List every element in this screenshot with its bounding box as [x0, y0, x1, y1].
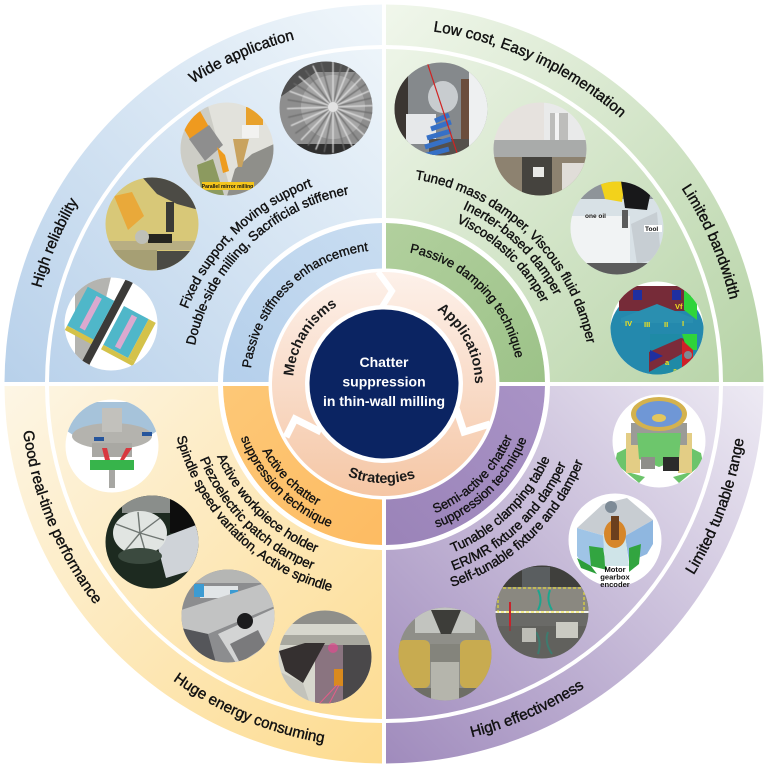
center title — [323, 354, 445, 409]
circular arrows ring — [286, 272, 490, 480]
method list line 1: Fixed support, Moving support — [179, 178, 313, 308]
image label: one oil: one oil — [585, 213, 606, 220]
image labels: Motor gearbox encoder: encoder — [600, 580, 630, 589]
outer label: Wide application: Wide application — [187, 32, 294, 82]
image labels: model zones: a — [673, 366, 678, 375]
quadrant background: purple bands — [386, 386, 764, 764]
technique label: Passive stiffness enhancement — [242, 242, 368, 368]
method list line 3: Spindle speed variation, Active spindle — [176, 436, 332, 591]
image labels: model zones — [625, 302, 684, 375]
technique label: Passive damping technique — [410, 244, 522, 358]
image labels: model zones: II — [664, 320, 668, 329]
outer label: Limited bandwidth: Limited bandwidth — [682, 183, 740, 300]
photo: active workpiece holder model — [65, 399, 159, 493]
ring label: Applications: Applications — [437, 304, 483, 384]
outer label: Limited tunable range: Limited tunable range — [685, 438, 745, 574]
photo: viscoelastic damper model — [610, 281, 704, 376]
quadrant background: orange bands — [4, 386, 382, 764]
image labels: model zones: a — [665, 358, 670, 367]
photo caption: Parallel mirror milling — [202, 184, 253, 190]
outer label: Huge energy consuming: Huge energy consuming — [174, 672, 324, 746]
center title: suppression — [342, 374, 426, 390]
method list line 1: Active workpiece holder — [216, 456, 318, 552]
panel: semi-active chatter suppression quadrant — [386, 386, 764, 764]
photo: tuned mass damper with blue spring — [394, 62, 488, 156]
technique label line 2: suppression technique — [241, 436, 332, 526]
image labels: Motor gearbox encoder: Motor — [604, 565, 626, 574]
image label: Tool: Tool — [645, 226, 658, 233]
method list line 1: Tunable clamping table — [449, 457, 550, 552]
photo: damper in oil tank — [570, 181, 664, 275]
photo: viscous fluid damper table — [493, 102, 587, 196]
photo: radial rib fan workpiece — [279, 61, 379, 155]
center title: in thin-wall milling — [323, 393, 445, 409]
method list line 2: Double-side milling, Sacrificial stiffener — [186, 187, 348, 345]
image labels: model zones: III — [644, 320, 650, 329]
outer label: Low cost, Easy implementation: Low cost, Easy implementation — [434, 21, 624, 118]
technique label line 1: Active chatter — [262, 449, 321, 505]
outer label: High reliability: High reliability — [31, 197, 78, 288]
photo: piezoelectric patch setup — [181, 569, 275, 663]
quadrant background: green bands — [386, 4, 764, 382]
ring label: Strategies: Strategies — [348, 468, 415, 486]
photo: ER/MR fixture — [495, 565, 589, 659]
ring label: Mechanisms: Mechanisms — [284, 300, 336, 376]
method list line 2: ER/MR fixture and damper — [450, 461, 566, 570]
image labels: model zones: I — [682, 319, 684, 328]
center title: Chatter — [359, 354, 409, 370]
technique label line 1: Semi-active chatter — [432, 434, 512, 512]
quadrant background: blue bands — [4, 4, 382, 382]
panel: central hub — [268, 268, 500, 500]
outer label: Good real-time performance: Good real-time performance — [24, 430, 100, 604]
method list line 2: Piezoelectric patch damper — [200, 456, 315, 569]
photo: stiffener fixture blocks — [64, 278, 158, 370]
center circle — [310, 310, 458, 458]
photo: motor gearbox encoder model — [568, 493, 662, 587]
photo: spindle with sensor patch — [278, 610, 372, 704]
outer label: High effectiveness: High effectiveness — [470, 682, 584, 737]
image labels: Motor gearbox encoder: gearbox — [600, 572, 631, 582]
photo: milling setup with robot arm — [105, 177, 199, 271]
photo: magnetic coil damper setup — [398, 607, 492, 701]
photo: impeller milling — [105, 495, 199, 589]
white hub background — [268, 268, 500, 500]
image labels: model zones: IV — [625, 319, 632, 328]
image labels: Motor gearbox encoder — [600, 565, 631, 589]
panel: active chatter suppression quadrant — [4, 386, 382, 764]
technique label line 2: suppression technique — [435, 438, 526, 528]
panel: passive stiffness enhancement quadrant — [4, 4, 382, 382]
method list line 2: Inerter-based damper — [464, 200, 561, 294]
photo: parallel mirror milling robots — [180, 102, 274, 196]
method list line 1: Tuned mass damper, Viscous fluid damper — [416, 170, 594, 342]
method list line 3: Viscoelastic damper — [460, 214, 548, 302]
photo: tunable clamping table model — [612, 394, 706, 488]
image labels: model zones: Vf — [675, 302, 683, 311]
panel: passive damping technique quadrant — [386, 4, 764, 382]
method list line 3: Self-tunable fixture and damper — [450, 459, 582, 586]
